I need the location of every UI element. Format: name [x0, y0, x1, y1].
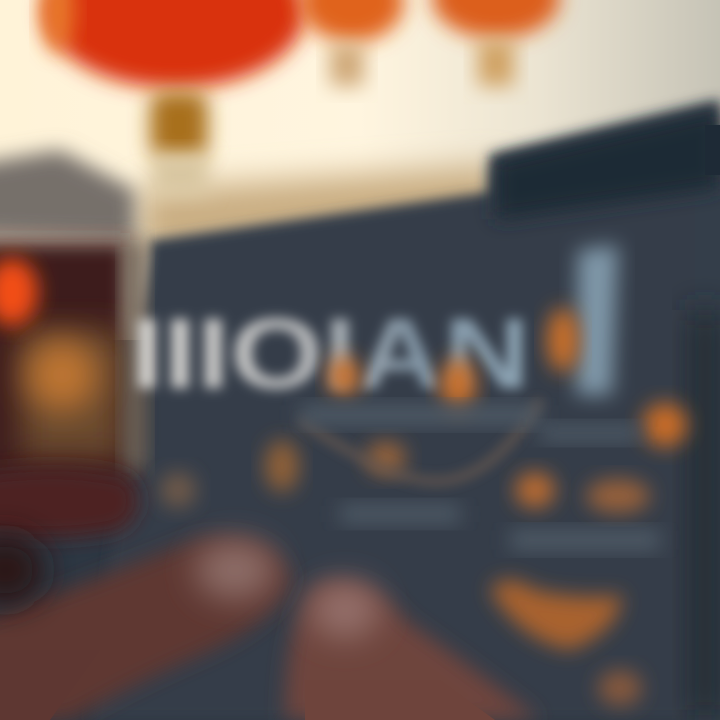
heading: blurred card title: IIIOIAN: [130, 298, 530, 410]
panel: dark card: [90, 100, 720, 720]
background: warm haze above card: [140, 165, 500, 255]
illustration: main finger base: [0, 650, 100, 720]
icon: small orange lantern: [300, 0, 404, 86]
illustration: second fingertip highlight: [311, 582, 379, 638]
illustration: upper dark finger: [0, 468, 138, 538]
panel: card right edge: [690, 310, 720, 720]
chart: blurred curve line: [300, 400, 540, 481]
illustration: second finger base: [305, 680, 495, 720]
panel: card top right strip: [705, 125, 720, 175]
illustration: main finger: [0, 537, 290, 720]
panel: building roof at left: [0, 150, 135, 240]
illustration: second finger: [285, 582, 540, 720]
icon: orange heart shape: [490, 580, 622, 650]
chart: blurred rising bar: [576, 245, 618, 395]
icon: amber light: [26, 339, 98, 411]
chart: orange data blobs: [160, 308, 687, 706]
panel: card right strip: [695, 125, 720, 720]
illustration: fingertip highlight: [195, 540, 275, 600]
icon: far orange lantern: [432, 0, 560, 86]
chart: light horizontal bands: [300, 405, 660, 550]
icon: glowing red light: [0, 258, 38, 326]
illustration: dark hand shadow: [0, 534, 45, 606]
panel: left window: [0, 240, 146, 480]
icon: large red lantern: [42, 0, 305, 195]
panel: card top darker band: [495, 108, 720, 220]
background: bright sky: [0, 0, 720, 340]
